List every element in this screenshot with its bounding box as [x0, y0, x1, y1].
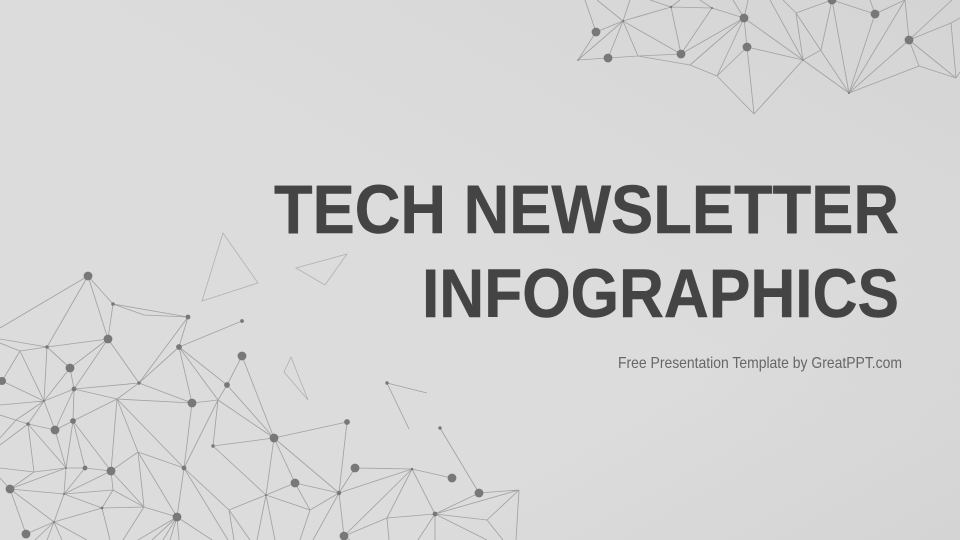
floating triangle: small [284, 357, 308, 400]
title: INFOGRAPHICS [422, 255, 899, 332]
nodes: top right [577, 0, 913, 94]
title: TECH NEWSLETTER [274, 171, 899, 248]
network: bottom left [0, 272, 519, 540]
floating fragment: open lines with node [385, 381, 427, 429]
nodes: bottom left [0, 272, 483, 540]
floating triangle: large [202, 233, 258, 301]
floating triangle: medium [296, 254, 347, 285]
network: top right [577, 0, 960, 114]
title [274, 171, 899, 332]
subtitle: Free Presentation Template by GreatPPT.com [618, 355, 902, 372]
